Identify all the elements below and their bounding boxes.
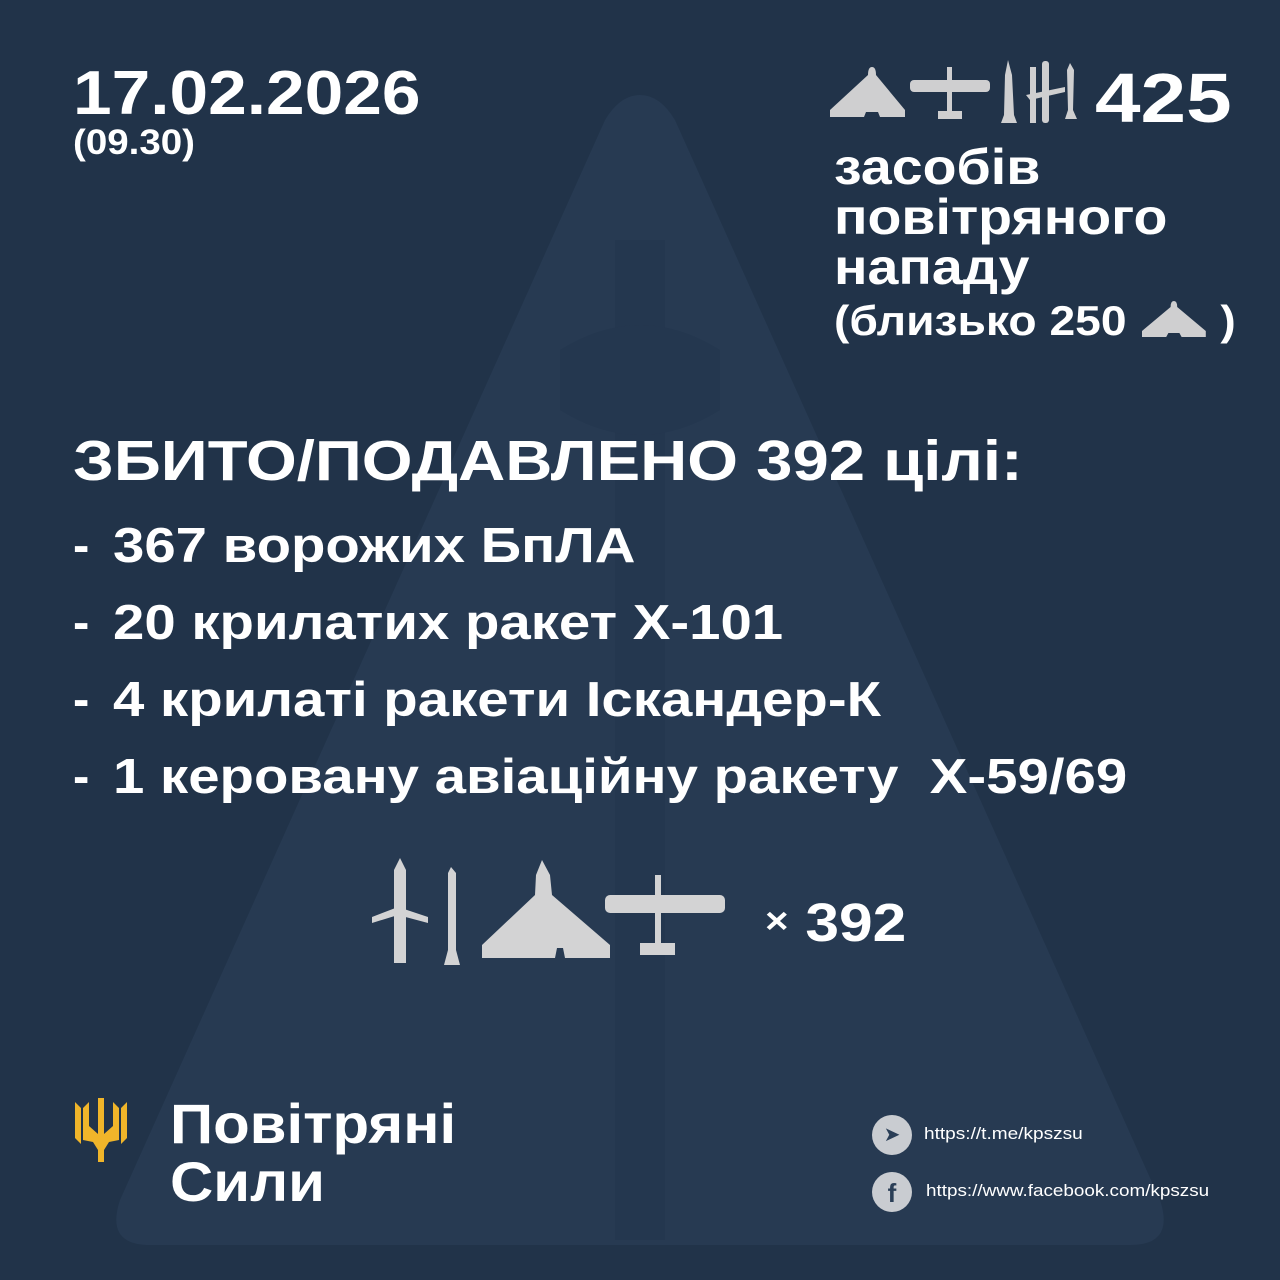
list: - xyxy=(73,596,89,650)
facebook link xyxy=(872,1172,1209,1212)
text: близько 250 drones: (близько 250 ) xyxy=(834,297,1236,344)
logo trident xyxy=(75,1098,127,1162)
list xyxy=(73,519,1127,804)
time: (09.30) xyxy=(73,123,195,162)
telegram link: https://t.me/kpszsu xyxy=(924,1124,1083,1143)
list: - xyxy=(73,750,89,804)
text: засобів повітряного нападу: повітряного xyxy=(834,189,1167,245)
list: - xyxy=(73,673,89,727)
list: 1 керовану авіаційну ракету Х-59/69 xyxy=(113,750,1127,804)
heading: ЗБИТО/ПОДАВЛЕНО 392 цілі: xyxy=(73,429,1023,493)
date: 17.02.2026 xyxy=(73,59,421,128)
list: 20 крилатих ракет Х-101 xyxy=(113,596,783,650)
telegram link: ➤ xyxy=(884,1124,900,1146)
icons: destroyed xyxy=(372,858,725,965)
facebook link: https://www.facebook.com/kpszsu xyxy=(926,1181,1209,1200)
facebook link: f xyxy=(888,1178,896,1208)
list: 367 ворожих БпЛА xyxy=(113,519,635,573)
icons: attack means xyxy=(830,60,1077,123)
list: 4 крилаті ракети Іскандер-К xyxy=(113,673,881,727)
brand name xyxy=(170,1092,456,1213)
text: засобів повітряного нападу xyxy=(834,139,1167,295)
brand name: Сили xyxy=(170,1150,325,1213)
telegram link xyxy=(872,1115,1083,1155)
list: - xyxy=(73,519,89,573)
text: засобів повітряного нападу: нападу xyxy=(834,239,1030,295)
text: засобів повітряного нападу: засобів xyxy=(834,139,1040,195)
multiplier: × 392 xyxy=(765,893,906,953)
total 425: 425 xyxy=(1095,59,1232,137)
brand name: Повітряні xyxy=(170,1092,456,1155)
